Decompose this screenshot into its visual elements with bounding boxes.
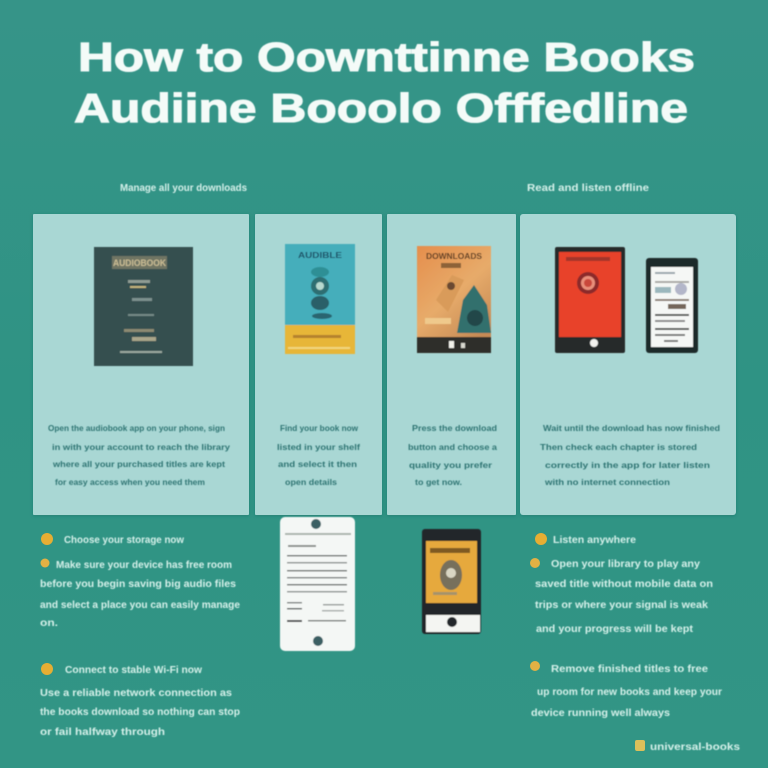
tip block: lower right second	[530, 661, 722, 719]
icon: orange bullet	[530, 661, 540, 671]
step text: Find your book now	[280, 423, 358, 433]
step text: button and choose a	[408, 442, 497, 452]
icon: orange book cover	[417, 246, 491, 353]
step text: Open the audiobook app on your phone, sign	[48, 423, 225, 433]
tip block: lower right second: device running well always	[531, 707, 670, 719]
icon: dark book cover	[94, 247, 193, 366]
icon: orange book cover: DOWNLOADS	[426, 252, 483, 261]
footer credit: universal-books	[650, 742, 740, 753]
panel: second step	[255, 214, 382, 515]
icon: orange bullet	[41, 663, 53, 675]
step text: with no internet connection	[544, 477, 670, 487]
icon: phone with document	[646, 258, 698, 353]
tip block: lower left second: the books download so nothing can stop	[40, 706, 240, 718]
panel: third step	[387, 214, 516, 515]
step text: quality you prefer	[409, 460, 493, 470]
footer credit	[635, 740, 740, 753]
title	[74, 34, 695, 131]
panel: fourth step	[520, 214, 736, 515]
tip block: lower right first	[530, 533, 713, 635]
icon: white document device	[280, 517, 355, 651]
step text: Then check each chapter is stored	[540, 442, 697, 452]
icon: orange bullet	[535, 533, 547, 545]
left column heading: Manage all your downloads	[120, 182, 247, 194]
tip block: lower left first	[40, 533, 240, 629]
step text: and select it then	[278, 459, 357, 469]
step text: correctly in the app for later listen	[545, 460, 710, 470]
step text: listed in your shelf	[277, 442, 360, 452]
tip block: lower right first: Listen anywhere	[553, 534, 636, 546]
tip block: lower left first: before you begin saving big audio files	[40, 578, 236, 590]
tip block: lower right second: Remove finished titles to free	[551, 663, 708, 675]
tip block: lower left first: Choose your storage now	[64, 534, 185, 546]
icon: red tablet	[555, 247, 625, 353]
icon: teal book cover: AUDIBLE	[298, 251, 343, 260]
tip block: lower right first: trips or where your signal is weak	[535, 599, 708, 611]
step text: for easy access when you need them	[55, 477, 205, 487]
step text: where all your purchased titles are kept	[52, 459, 225, 469]
step text	[277, 423, 360, 487]
step text: to get now.	[415, 477, 462, 487]
icon: teal book cover	[285, 244, 355, 354]
panel: first step	[33, 214, 249, 515]
step text	[48, 423, 230, 487]
step text: open details	[285, 477, 337, 487]
step text	[540, 423, 720, 487]
step text: Wait until the download has now finished	[543, 423, 720, 433]
icon: footer badge	[635, 740, 645, 751]
tip block: lower left first: and select a place you can easily manage	[40, 599, 240, 611]
step text: in with your account to reach the library	[52, 442, 230, 452]
tip block: lower left first: on.	[40, 617, 58, 629]
icon: orange bullet	[41, 533, 53, 545]
title: Audiine Booolo Offfedline	[74, 85, 688, 131]
tip block: lower right first: and your progress will be kept	[536, 623, 694, 635]
step text: Press the download	[412, 423, 497, 433]
step text	[408, 423, 497, 487]
icon: dark book cover: AUDIOBOOK	[113, 258, 166, 268]
tip block: lower right first: saved title without mobile data on	[535, 578, 713, 590]
tip block: lower right second: up room for new books and keep your	[537, 686, 722, 698]
tip block: lower right first: Open your library to play any	[551, 558, 700, 570]
icon: phone with yellow book	[422, 529, 481, 634]
right column heading: Read and listen offline	[527, 182, 649, 194]
tip block: lower left second: Use a reliable network connection as	[40, 687, 232, 699]
tip block: lower left second	[40, 663, 240, 738]
title: How to Oownttinne Books	[78, 34, 695, 80]
tip block: lower left second: Connect to stable Wi-Fi now	[65, 664, 203, 676]
tip block: lower left first: Make sure your device has free room	[56, 559, 232, 571]
tip block: lower left second: or fail halfway through	[40, 726, 165, 738]
